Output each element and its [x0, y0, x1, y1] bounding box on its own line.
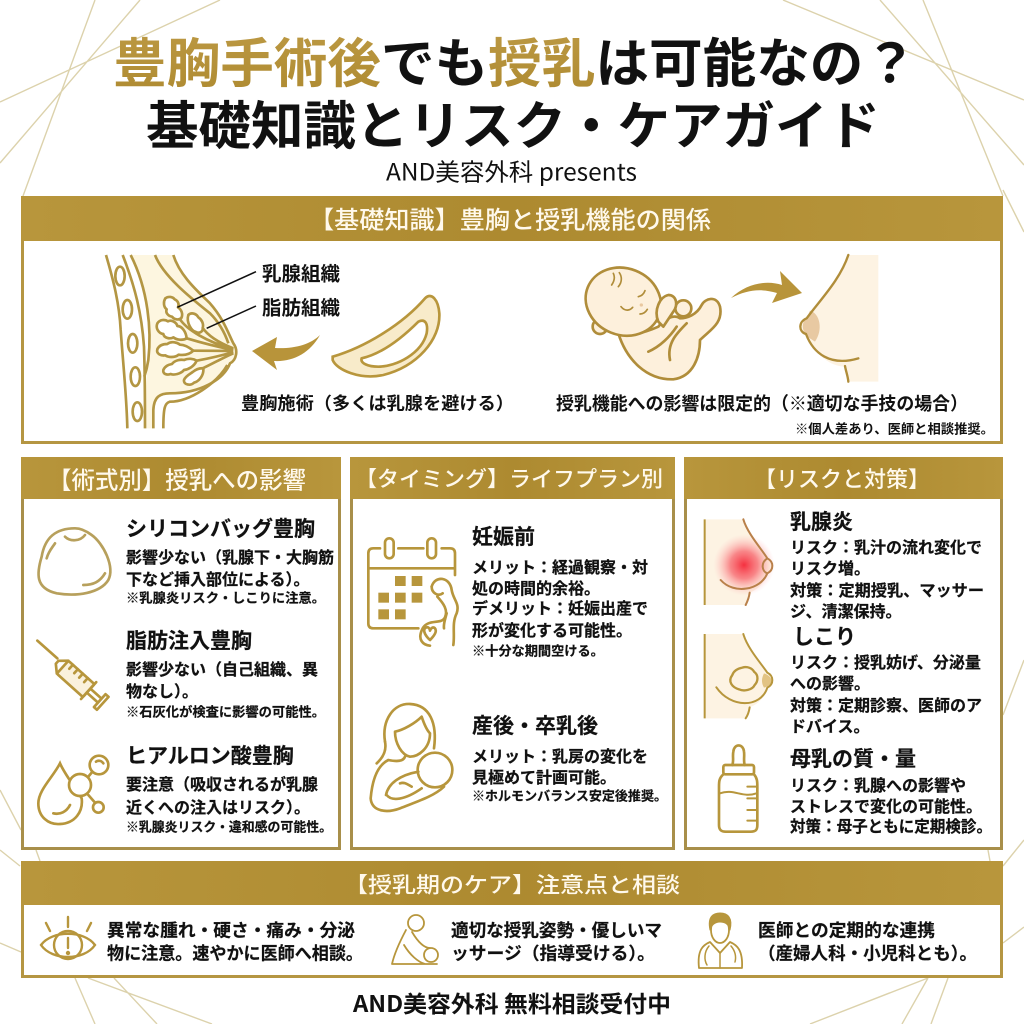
- item: before pregnancy: メリット：経過観察・対: [472, 554, 648, 578]
- icon: doctor: [699, 913, 742, 968]
- icon: breast profile: [800, 255, 878, 382]
- title: 基礎知識とリスク・ケアガイド: [146, 84, 880, 160]
- heading: by timing: 【タイミング】ライフプラン別: [355, 462, 663, 494]
- item: mastitis: ジ、清潔保持。: [790, 598, 902, 622]
- item: milk quality: ストレスで変化の可能性。: [790, 793, 982, 817]
- item: hyaluronic: ヒアルロン酸豊胸: [126, 740, 294, 770]
- item: lump: しこり: [793, 621, 856, 651]
- item: fat injection: 脂肪注入豊胸: [126, 625, 252, 655]
- item: lump: ドバイス。: [790, 713, 870, 737]
- item: mastitis: [790, 506, 984, 622]
- heading: risks and measures: 【リスクと対策】: [754, 462, 930, 494]
- note: consult doctor: ※個人差あり、医師と相談推奨。: [795, 418, 994, 438]
- item: mastitis: リスク増。: [790, 555, 870, 579]
- text: posture: [451, 918, 662, 966]
- title: 豊胸手術後でも授乳は可能なの？: [113, 22, 917, 98]
- item: lump: [790, 621, 982, 737]
- text: doctor: 医師との定期的な連携: [758, 918, 935, 942]
- heading: basic knowledge: 【基礎知識】豊胸と授乳機能の関係: [309, 202, 712, 236]
- item: mastitis: 対策：定期授乳、マッサー: [790, 577, 984, 601]
- icon: nursing posture: [392, 915, 438, 964]
- item: fat injection: ※石灰化が検査に影響の可能性。: [126, 702, 325, 720]
- item: postpartum: メリット：乳房の変化を: [472, 743, 648, 767]
- item: before pregnancy: 妊娠前: [472, 521, 535, 551]
- caption: limited impact: 授乳機能への影響は限定的（※適切な手技の場合）: [556, 390, 968, 416]
- item: silicone: シリコンバッグ豊胸: [126, 513, 315, 543]
- item: before pregnancy: 形が変化する可能性。: [472, 617, 632, 641]
- icon: eye alert: [41, 917, 95, 959]
- title: [113, 22, 917, 160]
- panel: by timing: [350, 457, 675, 848]
- arrow: to breast: [731, 271, 802, 303]
- label: mammary tissue: 乳腺組織: [262, 258, 341, 286]
- text: symptoms: 物に注意。速やかに医師へ相談。: [107, 940, 363, 966]
- panel: by procedure: [21, 457, 341, 848]
- panel: risks and measures: [684, 457, 1003, 848]
- icon: baby bottle: [719, 745, 757, 832]
- item: fat injection: 物なし）。: [126, 678, 198, 702]
- text: posture: 適切な授乳姿勢・優しいマ: [451, 918, 662, 942]
- icon: sleeping baby: [575, 256, 721, 379]
- label: fat tissue: 脂肪組織: [262, 292, 341, 320]
- text: posture: ッサージ（指導受ける）。: [451, 940, 655, 966]
- icon: lump: [705, 634, 772, 718]
- heading: care: 【授乳期のケア】注意点と相談: [344, 868, 680, 900]
- heading: by procedure: 【術式別】授乳への影響: [48, 460, 306, 496]
- text: symptoms: [107, 918, 363, 966]
- icon: hyaluronic drop: [38, 756, 108, 824]
- item: before pregnancy: 処の時間的余裕。: [472, 575, 600, 599]
- text: doctor: [758, 918, 977, 966]
- subtitle: AND美容外科 presents: [386, 152, 637, 188]
- item: silicone: ※乳腺炎リスク・しこりに注意。: [126, 588, 325, 606]
- icon: silicone implant: [38, 528, 110, 595]
- icon: implant: [333, 296, 439, 376]
- item: before pregnancy: [472, 521, 648, 660]
- panel: basic knowledge: [21, 196, 1003, 442]
- item: mastitis: リスク：乳汁の流れ変化で: [790, 534, 982, 558]
- item: fat injection: [126, 625, 325, 720]
- text: doctor: （産婦人科・小児科とも）。: [758, 940, 977, 966]
- item: postpartum: 産後・卒乳後: [472, 710, 598, 740]
- item: hyaluronic: ※乳腺炎リスク・違和感の可能性。: [126, 816, 332, 836]
- item: silicone: [126, 513, 334, 606]
- item: milk quality: 母乳の質・量: [790, 743, 916, 773]
- text: symptoms: 異常な腫れ・硬さ・痛み・分泌: [107, 918, 356, 942]
- item: lump: への影響。: [790, 670, 870, 694]
- item: before pregnancy: デメリット：妊娠出産で: [472, 595, 648, 619]
- item: postpartum: 見極めて計画可能。: [472, 764, 616, 788]
- diagram: breast anatomy: [106, 255, 256, 428]
- panel: care during breastfeeding: [21, 861, 1003, 976]
- item: milk quality: [790, 743, 992, 837]
- item: hyaluronic: 要注意（吸収されるが乳腺: [126, 771, 318, 795]
- item: lump: 対策：定期診察、医師のア: [790, 692, 982, 716]
- item: mastitis: 乳腺炎: [790, 506, 853, 536]
- footer: AND美容外科 無料相談受付中: [352, 985, 671, 1019]
- item: fat injection: 影響少ない（自己組織、異: [126, 656, 318, 680]
- icon: mother and baby: [371, 704, 452, 811]
- item: lump: リスク：授乳妨げ、分泌量: [790, 649, 981, 673]
- item: before pregnancy: ※十分な期間空ける。: [472, 640, 604, 660]
- arrow: to breast: [252, 335, 320, 370]
- caption: augmentation: 豊胸施術（多くは乳腺を避ける）: [241, 390, 514, 416]
- item: postpartum: [472, 710, 667, 804]
- item: hyaluronic: [126, 740, 332, 836]
- item: silicone: 下など挿入部位による）。: [126, 566, 310, 590]
- icon: calendar and pregnant woman: [368, 538, 458, 646]
- item: silicone: 影響少ない（乳腺下・大胸筋: [126, 544, 334, 568]
- icon: mastitis: [705, 519, 775, 605]
- item: postpartum: ※ホルモンバランス安定後推奨。: [472, 786, 667, 804]
- item: milk quality: 対策：母子ともに定期検診。: [790, 813, 992, 837]
- icon: syringe: [37, 641, 110, 712]
- item: milk quality: リスク：乳腺への影響や: [790, 772, 966, 796]
- item: hyaluronic: 近くへの注入はリスク）。: [126, 794, 310, 818]
